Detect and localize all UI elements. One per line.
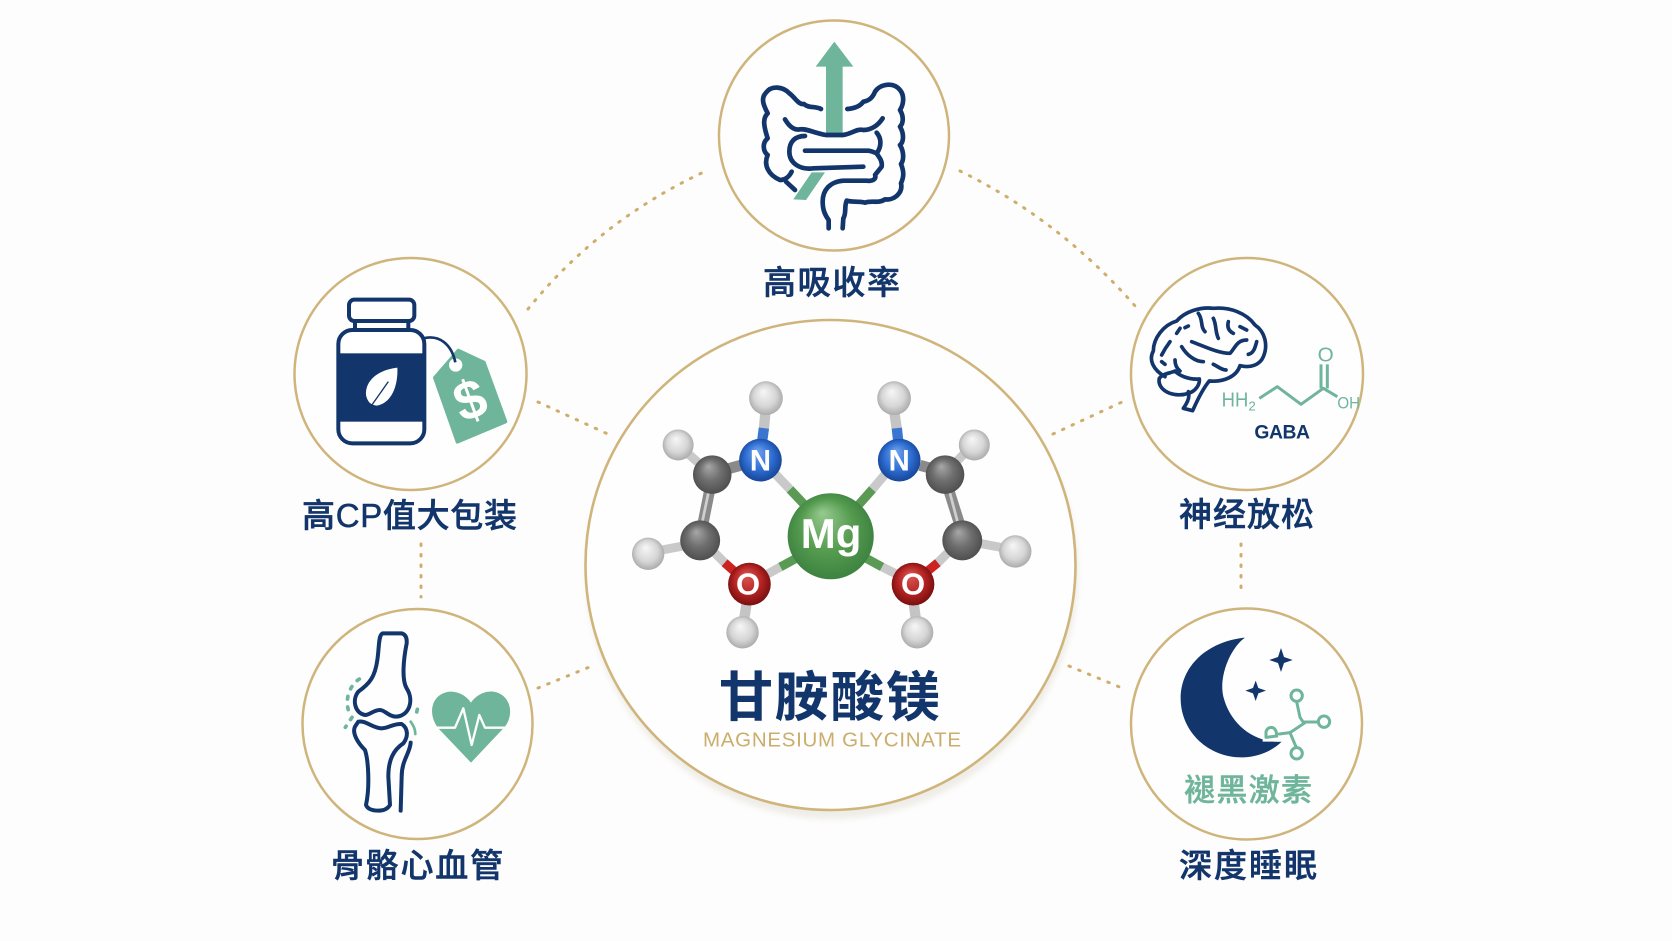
label: 高吸收率: 高吸收率 (763, 264, 900, 301)
icon: brain with GABA structure: O (1318, 344, 1334, 367)
icon: crescent moon with stars and melatonin molecule (1181, 638, 1330, 759)
heading: 甘胺酸镁: 甘胺酸镁 (719, 668, 940, 728)
icon: brain with GABA structure: HH (1222, 389, 1248, 411)
molecule: magnesium glycinate ball and stick model: O (901, 566, 925, 601)
molecule: magnesium glycinate ball and stick model (632, 381, 1031, 649)
icon: brain with GABA structure: GABA (1254, 423, 1310, 444)
molecule: magnesium glycinate ball and stick model: O (736, 566, 760, 601)
molecule: magnesium glycinate ball and stick model: N (889, 445, 910, 477)
icon: supplement bottle with price tag: $ (445, 365, 495, 434)
molecule: magnesium glycinate ball and stick model: Mg (801, 510, 861, 557)
icon: brain with GABA structure: 2 (1248, 399, 1256, 414)
panel: nerve relaxation (1131, 258, 1363, 533)
panel: bones and cardiovascular (302, 609, 532, 884)
icon: brain with GABA structure (1151, 308, 1360, 444)
panel: high absorption (719, 20, 949, 301)
label: 深度睡眠: 深度睡眠 (1179, 847, 1317, 884)
panel: central magnesium glycinate circle (586, 320, 1078, 819)
label: 骨骼心血管: 骨骼心血管 (331, 847, 503, 884)
icon: brain with GABA structure: OH (1337, 393, 1360, 412)
label: 褪黑激素: 褪黑激素 (1184, 773, 1312, 808)
icon: knee joint (345, 633, 510, 811)
label: 高CP值大包装: 高CP值大包装 (302, 497, 517, 534)
panel: high value large bottle (294, 258, 526, 534)
subtitle: MAGNESIUM GLYCINATE: MAGNESIUM GLYCINATE (703, 728, 961, 752)
icon: intestine with upward arrow (763, 42, 903, 228)
dotted connectors (421, 171, 1241, 688)
panel: deep sleep (1131, 608, 1362, 884)
icon: supplement bottle with price tag (337, 300, 506, 443)
label: 神经放松: 神经放松 (1179, 496, 1314, 533)
icon: heart with ECG (432, 692, 510, 763)
molecule: magnesium glycinate ball and stick model: N (750, 445, 771, 477)
